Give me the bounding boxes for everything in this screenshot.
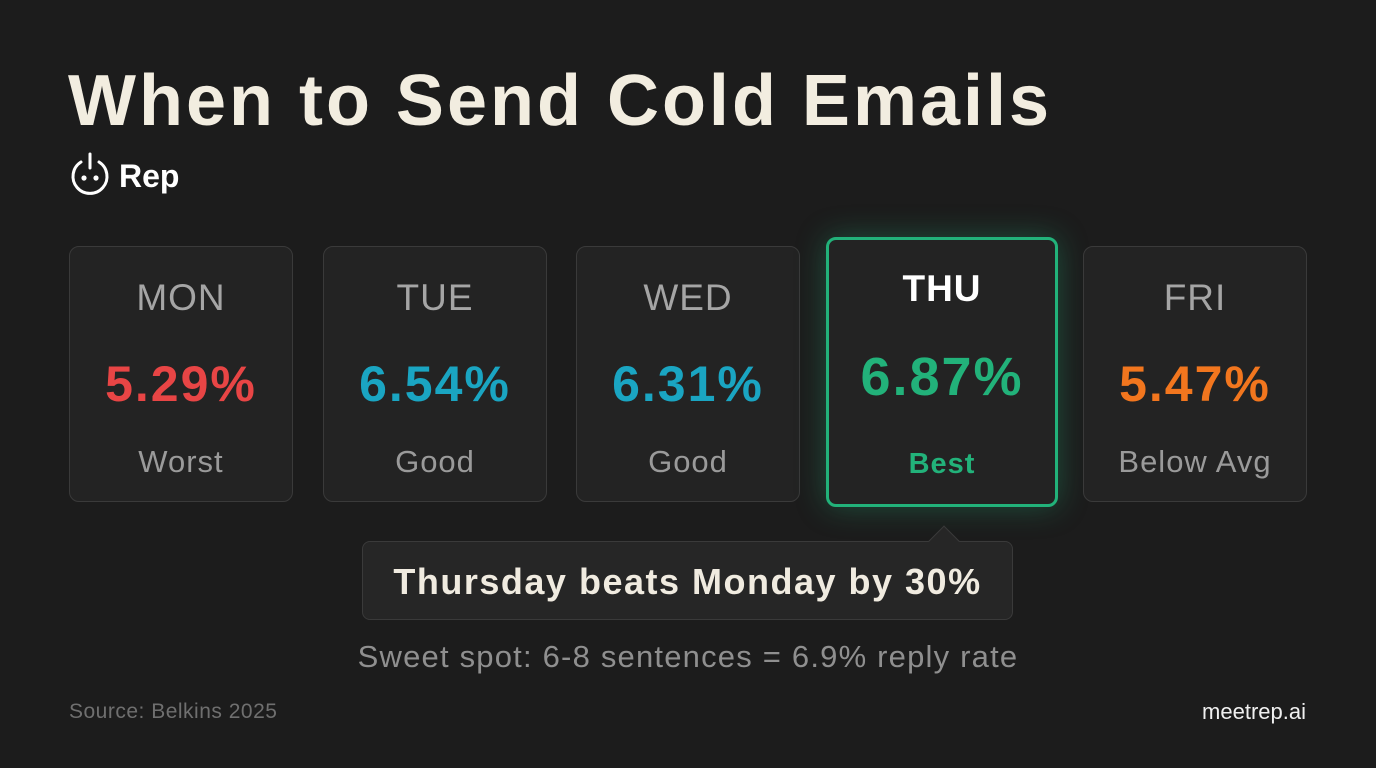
card: TUE: TUE xyxy=(396,277,474,318)
brand name: Rep xyxy=(119,158,179,194)
icon: power face xyxy=(72,152,108,195)
url: meetrep.ai xyxy=(1202,699,1306,724)
callout xyxy=(362,541,1013,620)
card: WED: WED xyxy=(643,277,733,318)
title: When to Send Cold Emails xyxy=(68,61,1052,141)
card: MON xyxy=(69,246,293,502)
logo xyxy=(72,152,179,195)
card: MON: Worst xyxy=(138,444,224,479)
card: FRI xyxy=(1083,246,1307,502)
card: MON: MON xyxy=(136,277,226,318)
card: THU (best): Best xyxy=(909,448,975,480)
card: FRI: Below Avg xyxy=(1118,444,1272,479)
source: Source: Belkins 2025 xyxy=(69,700,277,723)
card: TUE: 6.54% xyxy=(359,356,511,412)
pointer xyxy=(928,525,960,557)
card: WED xyxy=(576,246,800,502)
card: TUE xyxy=(323,246,547,502)
card: WED: 6.31% xyxy=(612,356,764,412)
card: FRI: FRI xyxy=(1164,277,1226,318)
card: MON: 5.29% xyxy=(105,356,257,412)
card: THU (best): THU xyxy=(902,268,982,309)
subtext: Sweet spot: 6-8 sentences = 6.9% reply rate xyxy=(358,639,1018,674)
callout: Thursday beats Monday by 30% xyxy=(393,561,982,602)
card: THU (best) xyxy=(826,237,1058,507)
card: TUE: Good xyxy=(395,444,475,479)
card: THU (best): 6.87% xyxy=(860,347,1024,407)
card: FRI: 5.47% xyxy=(1119,356,1271,412)
card: WED: Good xyxy=(648,444,728,479)
